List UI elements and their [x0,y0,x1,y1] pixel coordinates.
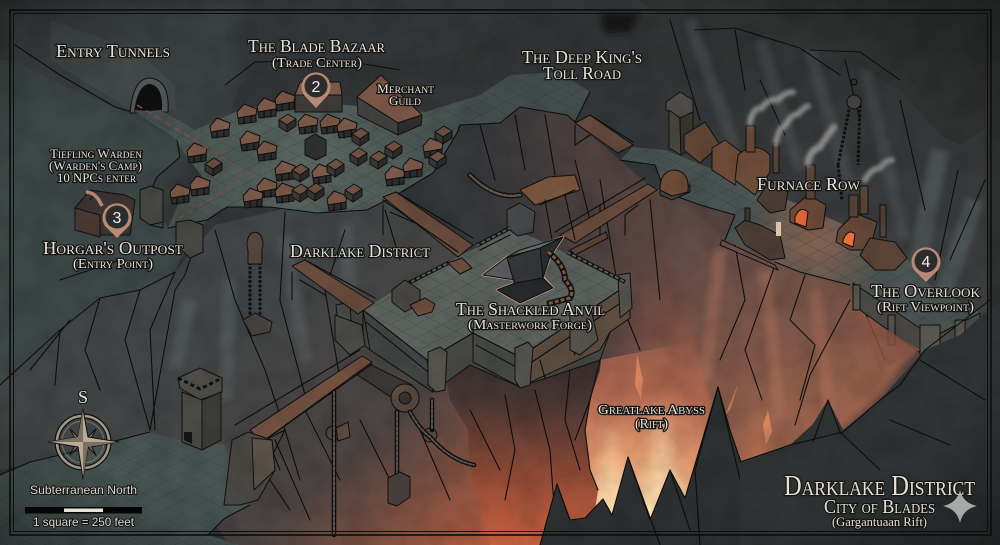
icon: sparkle [943,490,977,523]
upper right cavern darkness [640,0,1000,340]
right cliff column [665,200,920,470]
label: horgar's outpost: (Entry Point) [73,256,153,271]
wall towers [336,273,632,392]
label: toll road: Toll Road [543,63,621,83]
stalagmites [540,387,900,545]
upper tower [666,92,693,155]
hanging weight [388,472,410,506]
compass rose: S [78,387,88,407]
label: greatlake abyss [598,403,705,432]
winch and pulleys under platform [326,362,437,442]
dome kiosk [660,170,690,200]
scale caption: 1 square = 250 feet [33,515,135,529]
upper left cavern rock [0,0,240,400]
marker 4: 4 [922,254,931,271]
hoist chain right [838,79,861,200]
gate pillar [224,432,275,505]
central dark kiosk [305,134,326,160]
label: toll road: The Deep King's [522,47,642,67]
label: the overlook [871,281,981,314]
bridge: toll road [575,115,633,153]
market stalls [170,91,452,211]
label: merchant guild: Guild [389,94,422,108]
crane [478,175,580,250]
label: the overlook: (Rift Viewpoint) [877,299,974,314]
wall rail cap [395,228,625,290]
wall rail [395,228,625,290]
furnace row buildings [684,122,907,270]
label: tiefling warden: (Warden's Camp) [49,159,142,173]
mid rock cracks [480,115,660,350]
compass caption: Subterranean North [30,483,137,497]
furnace row ground [620,147,980,345]
label: greatlake abyss: (Rift) [635,417,668,432]
route dashes [137,105,241,222]
title block [784,471,975,529]
label: merchant guild [377,82,435,108]
compass rose [48,387,119,479]
hook chain left [243,232,272,336]
chains [334,175,520,535]
marker 2 [301,72,330,108]
bottom right rock mass [740,300,1000,545]
bottom left ground [0,432,250,545]
title block: City of Blades [824,496,935,518]
abyss glow [470,190,920,545]
smoke plumes [750,92,892,180]
left cliffs under bazaar [0,197,500,545]
upper left ground [0,45,207,385]
label: tiefling warden [49,147,143,185]
label: the overlook: The Overlook [871,281,981,301]
label: tiefling warden: Tiefling Warden [50,147,143,161]
marker 3: 3 [113,210,122,227]
anvil [483,237,572,304]
bazaar hall [295,82,342,112]
bridge: right of forge [555,178,657,255]
merchant guild [357,75,422,135]
label: shackled anvil: (Masterwork Forge) [468,317,592,332]
label: shackled anvil: The Shackled Anvil [456,299,605,319]
bazaar plateau [133,72,590,228]
bridge: top left [383,192,473,257]
label: horgar's outpost: Horgar's Outpost [43,238,183,258]
forge platform walls [363,283,630,392]
label: merchant guild: Merchant [377,82,435,96]
title block: Darklake District [784,471,975,502]
mid rock behind bridges [433,107,700,360]
marker 4 [912,247,940,282]
scale bar [25,507,142,514]
label: toll road [522,47,642,83]
label: blade bazaar: (Trade Center) [272,55,362,70]
bridge: mid left [292,260,375,314]
label: blade bazaar [248,36,385,70]
label: entry tunnels: Entry Tunnels [56,41,170,61]
entry tunnel [50,20,175,113]
crates by darklake platform [335,258,472,355]
warden camp palisade [75,186,203,258]
label: blade bazaar: The Blade Bazaar [248,36,385,56]
lower left tower [178,368,222,450]
back cavern wall [225,13,988,340]
marker 3 [103,203,132,238]
label: shackled anvil [456,299,605,332]
label: darklake district: Darklake District [290,241,430,261]
forge platform top [363,228,630,360]
label: furnace row: Furnace Row [757,174,861,194]
marker 2: 2 [312,79,321,96]
label: tiefling warden: 10 NPCs enter [57,171,136,185]
bridge: lower left [235,350,372,470]
label: greatlake abyss: Greatlake Abyss [598,403,705,418]
fire sparks [635,355,772,445]
abyss flame streaks [590,380,770,540]
central rock pillar [440,320,605,545]
title block: (Gargantuaan Rift) [832,514,927,529]
overlook wall [853,283,980,370]
label: horgar's outpost [43,238,183,271]
